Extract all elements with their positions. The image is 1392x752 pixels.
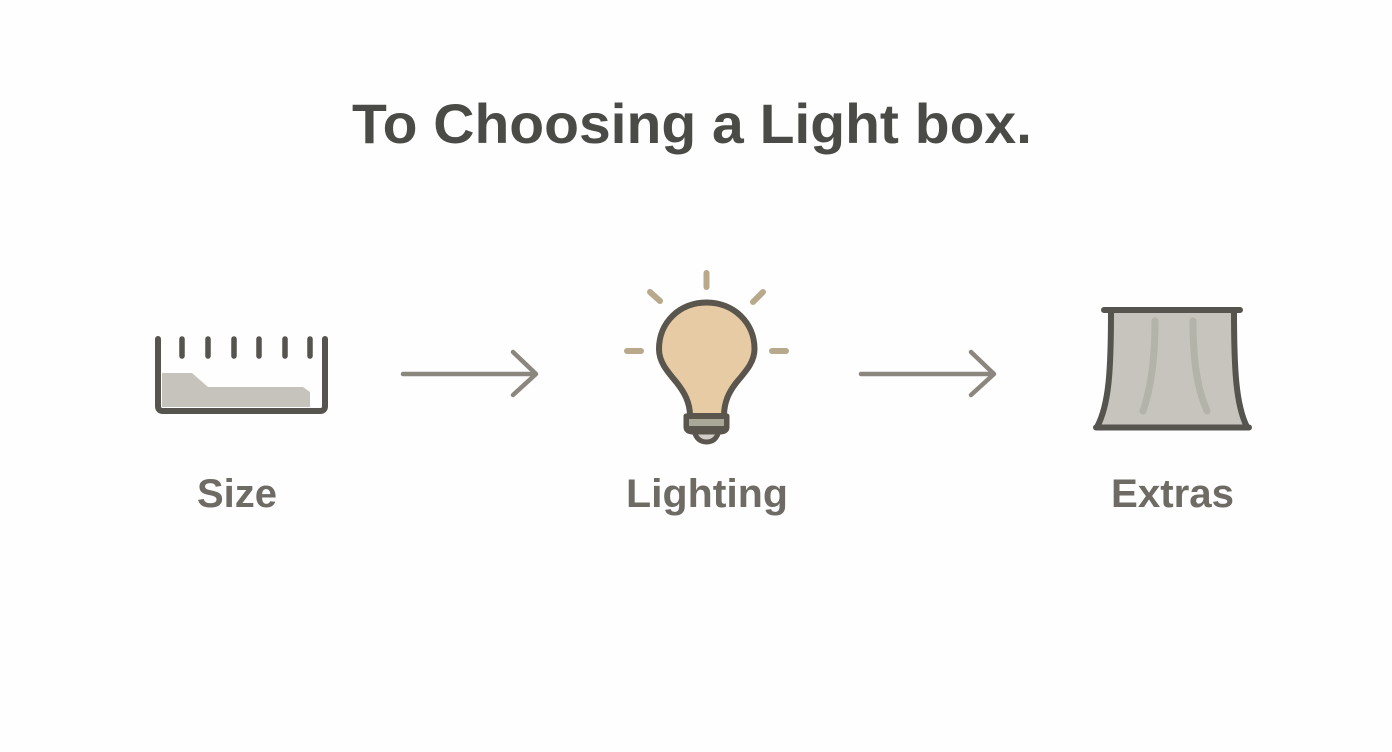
label: Extras: Extras (1111, 472, 1234, 516)
icon: light bulb (lighting) (627, 273, 786, 442)
label: Size: Size (197, 472, 277, 516)
icon: ruler (size) (158, 339, 325, 411)
bulb base band (689, 419, 724, 426)
label: Lighting: Lighting (626, 472, 788, 516)
arrow: lighting to extras (861, 352, 994, 395)
arrow: size to lighting (403, 352, 536, 395)
icon: lamp shade (extras) (1096, 310, 1249, 428)
title: To Choosing a Light box. (352, 92, 1032, 155)
